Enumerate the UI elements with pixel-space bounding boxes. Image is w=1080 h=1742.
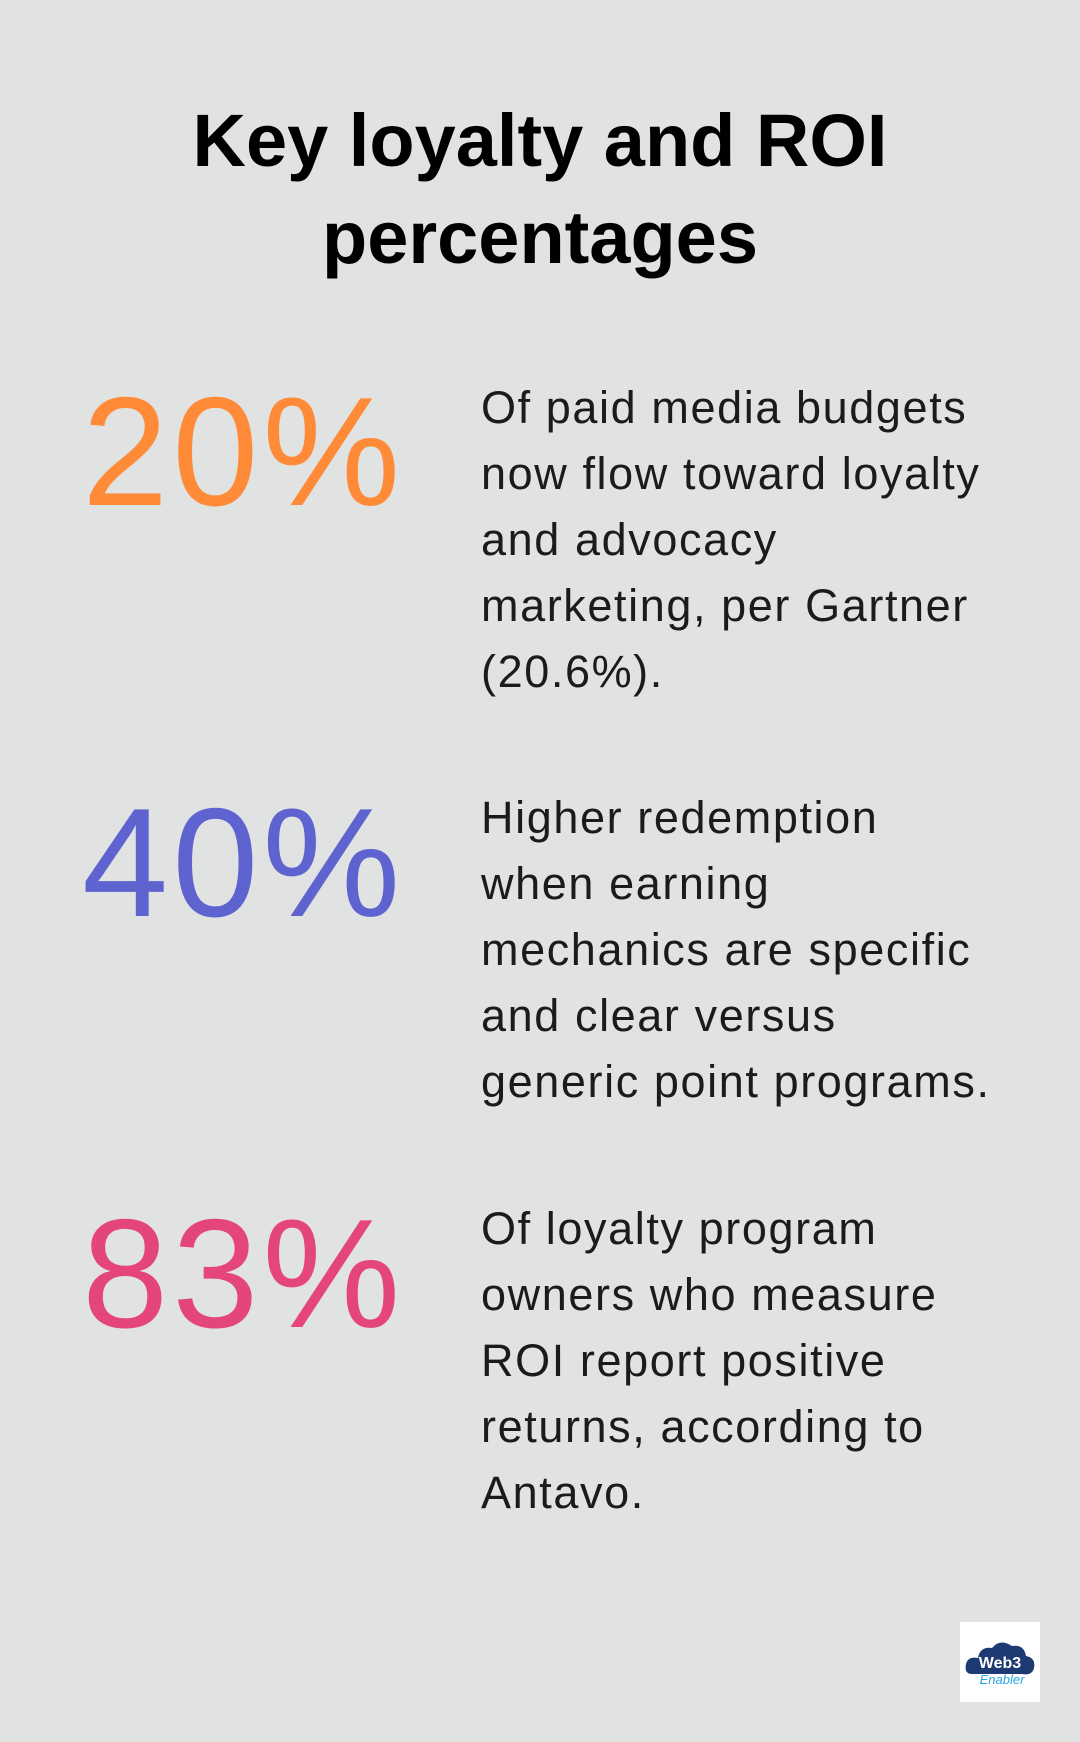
text: 20% description: now flow toward loyalty xyxy=(481,448,980,499)
title: Key loyalty and ROI xyxy=(192,99,887,182)
logo: Web3: Web3 xyxy=(979,1655,1021,1672)
text: 83% description: Of loyalty program xyxy=(481,1203,877,1254)
stat: 40%: 40% xyxy=(82,776,404,949)
text: 40% description: generic point programs. xyxy=(481,1056,991,1107)
stat: 83%: 83% xyxy=(82,1187,404,1360)
text: 20% description: Of paid media budgets xyxy=(481,382,967,433)
text: 83% description: ROI report positive xyxy=(481,1335,887,1386)
text: 20% description: marketing, per Gartner xyxy=(481,580,969,631)
logo: Web3 xyxy=(960,1622,1040,1702)
text: 83% description: owners who measure xyxy=(481,1269,938,1320)
title: percentages xyxy=(322,196,758,279)
text: 20% description xyxy=(481,382,980,697)
stat: 20%: 20% xyxy=(82,365,404,538)
text: 40% description: and clear versus xyxy=(481,990,837,1041)
text: 40% description: mechanics are specific xyxy=(481,924,971,975)
logo: Web3: Enabler xyxy=(980,1672,1025,1687)
title xyxy=(192,99,887,279)
text: 83% description: returns, according to xyxy=(481,1401,925,1452)
text: 83% description: Antavo. xyxy=(481,1467,645,1518)
text: 40% description: when earning xyxy=(481,858,770,909)
text: 20% description: (20.6%). xyxy=(481,646,664,697)
text: 40% description: Higher redemption xyxy=(481,792,878,843)
text: 40% description xyxy=(481,792,991,1107)
text: 20% description: and advocacy xyxy=(481,514,778,565)
text: 83% description xyxy=(481,1203,938,1518)
